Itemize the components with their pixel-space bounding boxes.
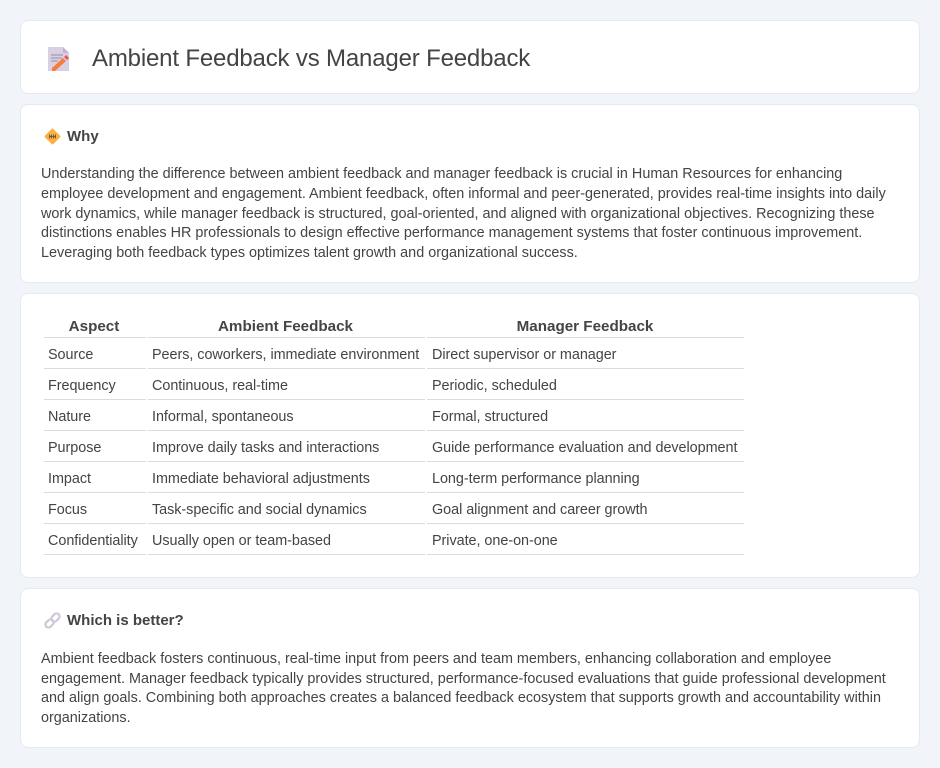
text block: why: work dynamics, while manager feedback is structured, goal-oriented, and aligned with organizational objectives. Recognizing these	[41, 206, 875, 222]
row: confidentiality: Private, one-on-one	[432, 533, 558, 549]
panel: comparison table	[20, 293, 920, 578]
row: focus	[48, 502, 648, 518]
text block: which is better: engagement. Manager feedback typically provides structured, performance-focused evaluations that guide professional development	[41, 671, 886, 687]
heading: which is better: Which is better?	[67, 612, 184, 629]
text block: which is better: Ambient feedback fosters continuous, real-time input from peers and team members, enhancing collaboration and employee	[41, 651, 831, 667]
text block: why: Leveraging both feedback types optimizes talent growth and organizational success.	[41, 245, 578, 261]
heading: why: Why	[67, 128, 99, 145]
row: impact: Impact	[48, 471, 91, 487]
title: Ambient Feedback vs Manager Feedback	[92, 45, 530, 72]
text block: why: employee development and engagement. Ambient feedback, often informal and peer-generated, provides real-time insights into daily	[41, 186, 886, 202]
row: purpose: Purpose	[48, 440, 101, 456]
text block: which is better	[41, 651, 886, 726]
text block: why	[41, 166, 886, 261]
row: confidentiality	[48, 533, 558, 549]
icon: warning diamond	[44, 128, 60, 144]
text block: which is better: organizations.	[41, 710, 131, 726]
row: source: Source	[48, 347, 93, 363]
row: frequency: Periodic, scheduled	[432, 378, 557, 394]
row: focus: Task-specific and social dynamics	[152, 502, 367, 518]
row: purpose	[48, 440, 738, 456]
row: frequency	[48, 378, 557, 394]
row: purpose: Improve daily tasks and interactions	[152, 440, 379, 456]
panel: which is better	[20, 588, 920, 748]
row: frequency: Frequency	[48, 378, 116, 394]
icon: link	[44, 612, 61, 629]
table header	[69, 318, 654, 335]
row: impact: Long-term performance planning	[432, 471, 640, 487]
row: nature: Nature	[48, 409, 91, 425]
row: purpose: Guide performance evaluation and development	[432, 440, 737, 456]
row: impact	[48, 471, 640, 487]
row: source: Peers, coworkers, immediate environment	[152, 347, 419, 363]
text block: which is better: and align goals. Combining both approaches creates a balanced feedback ecosystem that supports growth and accountability within	[41, 690, 881, 706]
table header: Ambient Feedback	[218, 318, 353, 335]
row: nature: Informal, spontaneous	[152, 409, 294, 425]
row: focus: Goal alignment and career growth	[432, 502, 648, 518]
row: source	[48, 347, 616, 363]
table header: Aspect	[69, 318, 119, 335]
text block: why: distinctions enables HR professionals to design effective performance management systems that foster continuous improvement.	[41, 225, 862, 241]
text block: why: Understanding the difference between ambient feedback and manager feedback is crucial in Human Resources for enhancing	[41, 166, 842, 182]
panel: title	[20, 20, 920, 94]
row: focus: Focus	[48, 502, 87, 518]
row: source: Direct supervisor or manager	[432, 347, 616, 363]
panel: why	[20, 104, 920, 283]
row: confidentiality: Usually open or team-based	[152, 533, 331, 549]
row: nature	[48, 409, 548, 425]
row: confidentiality: Confidentiality	[48, 533, 138, 549]
row: impact: Immediate behavioral adjustments	[152, 471, 370, 487]
icon: document with pencil	[48, 47, 69, 71]
row: frequency: Continuous, real-time	[152, 378, 288, 394]
row: nature: Formal, structured	[432, 409, 548, 425]
table header: Manager Feedback	[517, 318, 653, 335]
